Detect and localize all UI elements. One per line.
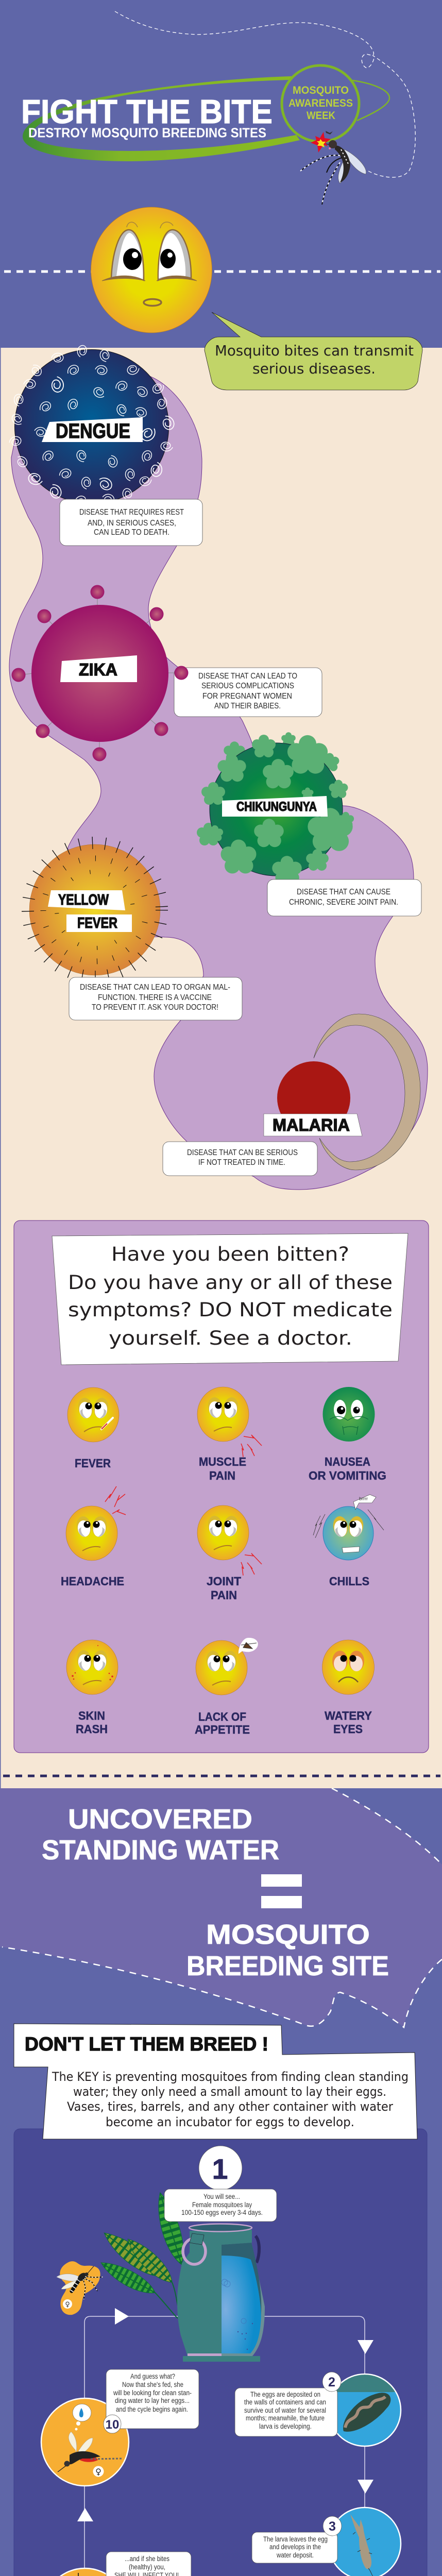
symptoms heading: symptoms? DO NOT medicate: [68, 1299, 393, 1321]
malaria description: [163, 1142, 317, 1176]
panel: don't let them breed: become an incubator for eggs to develop.: [106, 2115, 354, 2129]
subtitle: DESTROY MOSQUITO BREEDING SITES: [28, 125, 266, 140]
step 1 text: [164, 2189, 277, 2222]
step number 10: [104, 2415, 121, 2433]
step 9 text: [106, 2552, 191, 2576]
disease: yellow fever: [28, 843, 242, 1020]
step number 2: 2: [328, 2375, 335, 2389]
step number 3: 3: [329, 2519, 336, 2534]
symptom: lack of appetite: [195, 1638, 258, 1736]
callout: mosquito bites warning: [205, 312, 422, 390]
orange blob with female mosquito: ♀: [65, 2301, 70, 2309]
zika description: [174, 668, 322, 717]
symptom: muscle pain: MUSCLE: [199, 1455, 246, 1468]
symptom: nausea: [309, 1387, 386, 1482]
symptom: lack of appetite: APPETITE: [195, 1723, 250, 1736]
yellow fever label: [48, 890, 132, 932]
symptom: skin rash: [66, 1640, 118, 1736]
chikungunya label: [222, 796, 328, 817]
yellow fever description: TO PREVENT IT. ASK YOUR DOCTOR!: [92, 1003, 218, 1012]
symptom: headache: HEADACHE: [61, 1574, 124, 1588]
callout: mosquito bites warning: serious diseases.: [252, 360, 376, 377]
callout: mosquito bites warning: Mosquito bites can transmit: [215, 342, 414, 359]
mosquito awareness week badge: WEEK: [307, 110, 335, 122]
symptom: lack of appetite: LACK OF: [198, 1710, 246, 1723]
icon: worried emoji face: [91, 207, 212, 333]
malaria description: DISEASE THAT CAN BE SERIOUS: [187, 1148, 298, 1157]
equals sign: [261, 1874, 302, 1908]
panel: don't let them breed: Vases, tires, barrels, and any other container with water: [67, 2099, 393, 2114]
heading: uncovered standing water: [42, 1804, 279, 1866]
disease: zika: [11, 585, 322, 761]
divider dashes: [3, 1774, 440, 1777]
symptom: joint pain: PAIN: [211, 1588, 237, 1602]
step number 10: 10: [106, 2418, 119, 2432]
heading: mosquito breeding site: MOSQUITO: [206, 1919, 370, 1950]
step 2: [235, 2370, 402, 2446]
swoosh right: [352, 80, 389, 121]
chikungunya label: CHIKUNGUNYA: [236, 800, 317, 814]
symptom: chills: [313, 1495, 384, 1588]
clover virus spots: [201, 735, 354, 884]
step number 1: 1: [212, 2153, 228, 2185]
step 2 text: survive out of water for several: [244, 2406, 326, 2414]
step 2 text: The eggs are deposited on: [250, 2391, 320, 2398]
container: [177, 2224, 265, 2362]
symptom: nausea: OR VOMITING: [309, 1469, 386, 1482]
virus squiggles: [9, 344, 175, 505]
heading: mosquito breeding site: BREEDING SITE: [186, 1951, 389, 1981]
disease: malaria: [163, 1014, 420, 1176]
thought bubble with water drop: [73, 2404, 91, 2431]
heading: uncovered standing water: UNCOVERED: [68, 1804, 252, 1835]
yellow fever description: DISEASE THAT CAN LEAD TO ORGAN MAL-: [80, 983, 230, 992]
panel: life cycle background: [14, 2129, 427, 2576]
symptom: chills: brrrr: [359, 1496, 368, 1501]
panel: diseases blob background: [9, 376, 428, 1190]
step 3 text: [252, 2532, 337, 2563]
step 1 text: 100-150 eggs every 3-4 days.: [181, 2209, 263, 2216]
step number 1: [199, 2146, 242, 2190]
chikungunya description: [267, 879, 421, 916]
mosquito with blood belly: [58, 2432, 122, 2472]
symptom: joint pain: JOINT: [207, 1574, 241, 1588]
symptom: watery eyes: [322, 1640, 374, 1736]
panel: don't let them breed: water; they only need a small amount to lay their eggs.: [73, 2084, 386, 2099]
panel: standing water equals breeding site: [0, 1788, 442, 2027]
yellow fever description: [69, 977, 242, 1020]
yellow fever description: FUNCTION. THERE IS A VACCINE: [98, 993, 212, 1002]
heading: uncovered standing water: STANDING WATER: [42, 1835, 279, 1866]
icon: mosquito biting badge: [300, 131, 366, 205]
yellow fever label: FEVER: [77, 915, 117, 931]
symptoms heading: Do you have any or all of these: [68, 1272, 393, 1294]
female symbol: ♀: [95, 2467, 101, 2477]
header: fight the bite logo: [21, 11, 415, 205]
zika description: FOR PREGNANT WOMEN: [202, 692, 292, 701]
zika description: AND THEIR BABIES.: [214, 702, 281, 710]
zika spikes: [11, 585, 181, 761]
panel: don't let them breed: DON'T LET THEM BREED !: [25, 2033, 268, 2055]
step 10 text: ding water to lay her eggs...: [115, 2397, 190, 2404]
zika description: DISEASE THAT CAN LEAD TO: [198, 672, 297, 681]
symptom: muscle pain: [197, 1387, 262, 1482]
dengue label: DENGUE: [56, 420, 130, 443]
step 10 text: will be looking for clean stan-: [113, 2389, 192, 2397]
larva: [350, 2514, 373, 2576]
cycle connector lines: [84, 2316, 365, 2576]
spikes: [28, 843, 162, 977]
step number 3: [323, 2516, 342, 2536]
leaves: [97, 2190, 190, 2318]
step 2 text: the walls of containers and can: [244, 2398, 326, 2406]
step 10 text: And guess what?: [130, 2372, 175, 2380]
step 1 text: Female mosquitoes lay: [192, 2201, 252, 2209]
step 3: [252, 2507, 401, 2576]
malaria label: MALARIA: [273, 1115, 350, 1134]
mosquito awareness week badge: MOSQUITO: [293, 84, 349, 96]
arrow down: [75, 2573, 82, 2576]
step 1: leaves and water container: [54, 2146, 277, 2362]
step 9 text: ...and if she bites: [125, 2555, 169, 2563]
symptom: fever: FEVER: [75, 1456, 111, 1470]
symptoms heading: Have you been bitten?: [111, 1243, 349, 1265]
chikungunya description: CHRONIC, SEVERE JOINT PAIN.: [289, 898, 398, 907]
egg: [343, 2393, 390, 2432]
step 1 text: You will see...: [203, 2193, 240, 2200]
symptoms heading: yourself. See a doctor.: [109, 1327, 352, 1349]
malaria description: IF NOT TREATED IN TIME.: [198, 1158, 285, 1167]
disease: dengue: [9, 344, 202, 546]
panel: don't let them breed: The KEY is preventing mosquitoes from finding clean standing: [52, 2070, 409, 2084]
title: FIGHT THE BITE: [21, 93, 273, 130]
symptom: headache: [61, 1486, 126, 1588]
heading: mosquito breeding site: [186, 1919, 389, 1981]
symptom: watery eyes: EYES: [333, 1722, 363, 1736]
divider dashes: [4, 270, 440, 273]
step 3 text: The larva leaves the egg: [263, 2535, 328, 2543]
step 10 text: [106, 2369, 199, 2429]
disease: chikungunya: [197, 732, 421, 916]
symptom: fever: [67, 1387, 119, 1470]
step 2 text: [235, 2388, 337, 2436]
dengue description: DISEASE THAT REQUIRES REST: [79, 508, 184, 517]
symptom: chills: CHILLS: [329, 1574, 369, 1588]
female symbol: [93, 2466, 104, 2477]
step 3 text: and develops in the: [269, 2543, 321, 2551]
panel: symptoms: [14, 1221, 429, 1753]
orange blob with female mosquito: [54, 2254, 108, 2315]
symptom: watery eyes: WATERY: [325, 1709, 372, 1722]
green swoosh: [23, 76, 300, 161]
zika label: [60, 655, 137, 682]
step 10: [41, 2369, 199, 2486]
symptom: joint pain: [197, 1505, 262, 1602]
symptoms heading: [52, 1233, 408, 1365]
flight path dashed line: [115, 11, 415, 177]
step 10 text: and the cycle begins again.: [116, 2405, 188, 2413]
zika description: SERIOUS COMPLICATIONS: [201, 682, 294, 690]
yellow fever label: YELLOW: [58, 892, 109, 908]
panel: don't let them breed: [14, 2024, 417, 2139]
cycle arrows: [77, 2308, 373, 2576]
step 9: [60, 2551, 192, 2576]
chikungunya description: DISEASE THAT CAN CAUSE: [297, 888, 390, 896]
step 10 text: Now that she's fed, she: [122, 2381, 183, 2388]
dengue description: CAN LEAD TO DEATH.: [94, 528, 169, 537]
zika label: ZIKA: [79, 660, 117, 679]
symptom: skin rash: RASH: [76, 1722, 108, 1736]
symptom: nausea: NAUSEA: [325, 1455, 370, 1468]
mosquito awareness week badge: [282, 65, 359, 142]
dengue description: AND, IN SERIOUS CASES,: [88, 519, 176, 528]
step 2 text: months; meanwhile, the future: [246, 2414, 325, 2422]
symptom: skin rash: SKIN: [78, 1709, 105, 1722]
symptom: muscle pain: PAIN: [209, 1469, 235, 1482]
step number 2: [322, 2372, 341, 2392]
mosquito awareness week badge: AWARENESS: [288, 97, 353, 109]
step 3 text: water deposit.: [276, 2551, 314, 2559]
step 2 text: larva is developing.: [259, 2422, 312, 2430]
step 9 text: (healthy) you,: [129, 2563, 165, 2571]
dengue description: [60, 499, 202, 546]
malaria label: [264, 1114, 362, 1136]
